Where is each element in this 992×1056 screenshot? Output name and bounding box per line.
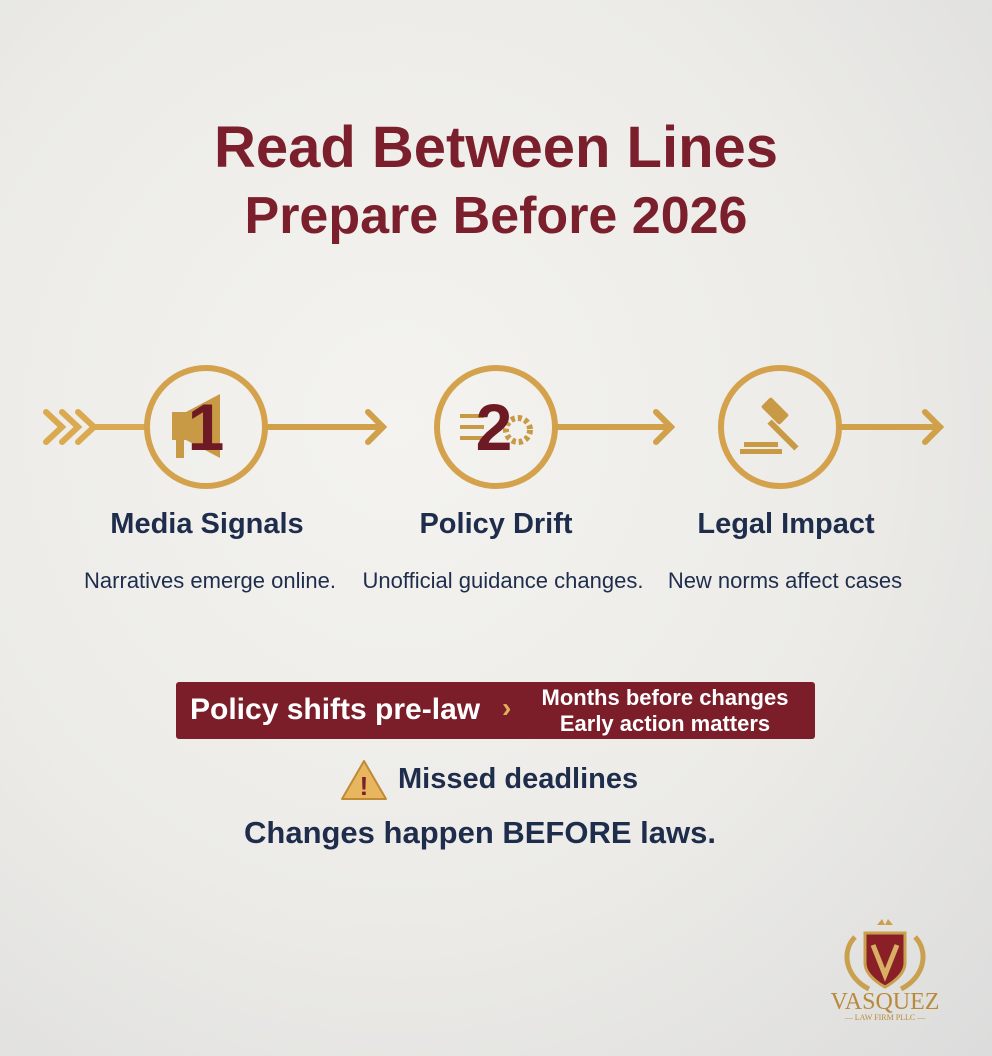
banner heading: Policy shifts pre-law <box>190 693 480 726</box>
arrow: start chevrons <box>46 412 146 442</box>
step 1 circle <box>147 368 265 486</box>
desc 2: Unofficial guidance changes. <box>363 568 643 593</box>
step label 2: Policy Drift <box>419 508 573 540</box>
warning: Missed deadlines <box>398 763 638 795</box>
step 2 circle: 2 <box>476 390 512 464</box>
logo: VASQUEZ <box>831 989 939 1015</box>
subtitle: Prepare Before 2026 <box>245 187 747 245</box>
arrow 1 <box>266 412 383 442</box>
icon: warning triangle: ! <box>360 771 368 801</box>
step label 1: Media Signals <box>110 508 304 540</box>
title: Read Between Lines <box>214 115 778 180</box>
arrow 3 <box>840 412 940 442</box>
desc 3: New norms affect cases <box>668 568 902 593</box>
desc 1: Narratives emerge online. <box>84 568 336 593</box>
step label 3: Legal Impact <box>697 508 875 540</box>
step 2 circle <box>437 368 555 486</box>
arrow 2 <box>556 412 671 442</box>
icon: warning triangle <box>341 760 387 801</box>
step 3 circle <box>721 368 839 486</box>
logo <box>830 919 939 1022</box>
logo: — LAW FIRM PLLC — <box>845 1013 925 1022</box>
closing statement: Changes happen BEFORE laws. <box>244 815 716 850</box>
icon: gavel <box>740 397 799 454</box>
step 1 circle: 1 <box>188 390 224 464</box>
icon: gear and lines <box>460 416 484 438</box>
process flow diagram <box>43 365 944 489</box>
banner detail <box>542 685 788 736</box>
banner <box>176 682 815 739</box>
icon: megaphone <box>172 394 220 458</box>
chevron: › <box>502 692 511 723</box>
banner detail: Early action matters <box>560 711 770 736</box>
warning <box>341 760 638 801</box>
banner detail: Months before changes <box>542 685 788 710</box>
